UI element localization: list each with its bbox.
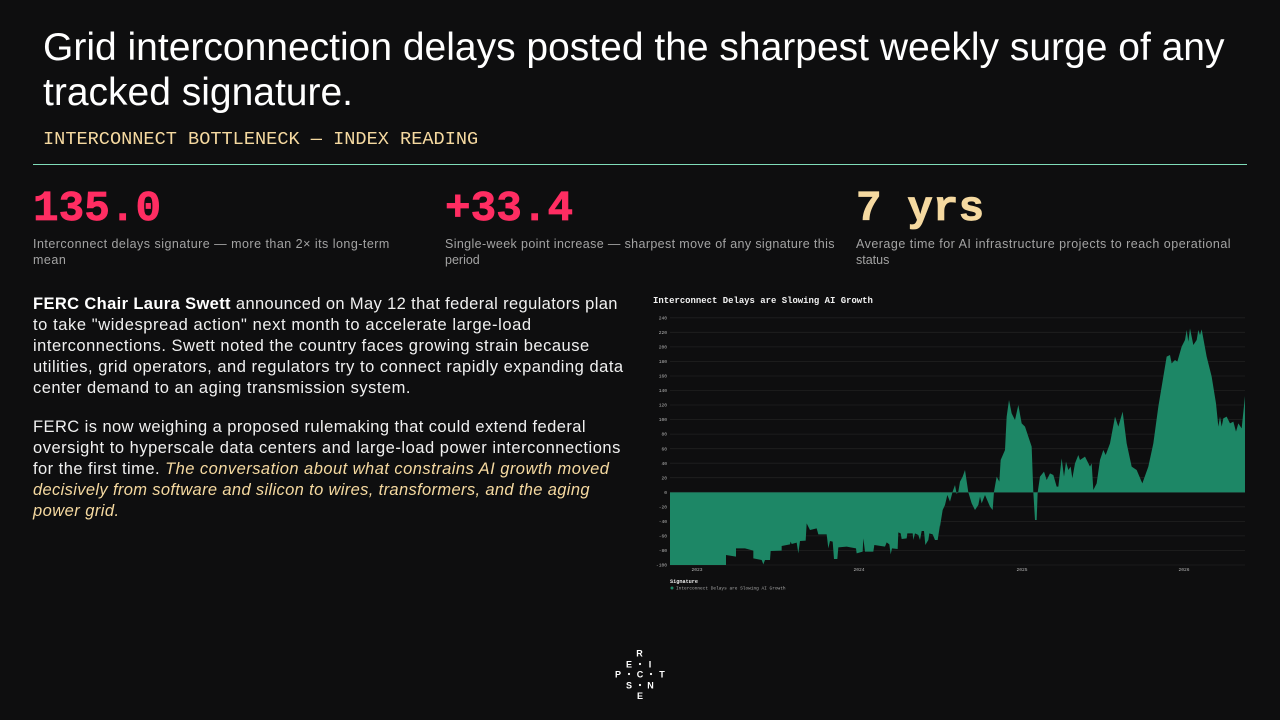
y axis labels: 20 [661,475,667,481]
header rule [33,164,1247,165]
body paragraph 2: power grid. [33,502,120,520]
stat: signature value: 135.0 [33,184,161,233]
x axis labels: 2025 [1016,567,1028,573]
y axis labels: 80 [661,432,667,438]
body paragraph 1: utilities, grid operators, and regulators try to connect rapidly expanding data [33,358,624,376]
y axis labels: -80 [659,548,667,554]
body paragraph 1: interconnections. Swett noted the country faces growing strain because [33,337,590,355]
stat caption: signature value [33,237,390,267]
y axis labels: 100 [659,417,667,423]
stat: average time: 7 yrs [856,184,984,233]
title: tracked signature. [43,71,353,114]
legend: Signature [670,579,698,585]
logo [615,648,665,701]
stat caption: weekly increase [445,237,835,267]
y axis labels: 140 [659,388,667,394]
stat caption: weekly increase: period [445,253,480,267]
y axis labels: 120 [659,403,667,409]
stat caption: weekly increase: Single-week point increase — sharpest move of any signature this [445,237,835,251]
y axis labels: 180 [659,359,667,365]
legend [670,579,786,592]
y axis labels: 240 [659,315,667,321]
y axis labels [656,315,667,569]
chart title: Interconnect Delays are Slowing AI Growth [653,296,873,306]
x axis labels: 2023 [691,567,703,573]
stat caption: average time: Average time for AI infrastructure projects to reach operational [856,237,1231,251]
y axis labels: 160 [659,374,667,380]
logo: E [626,660,632,670]
y axis labels: 0 [664,490,667,496]
logo: I [649,660,651,670]
logo: E [637,691,643,701]
y axis labels: 40 [661,461,667,467]
title [43,26,1225,114]
logo: T [659,670,665,680]
stat caption: signature value: Interconnect delays signature — more than 2× its long-term [33,237,390,251]
x axis labels [691,567,1190,573]
body paragraph 2: oversight to hyperscale data centers and large-load power interconnections [33,439,621,457]
body paragraph 2: FERC is now weighing a proposed rulemaking that could extend federal [33,418,586,436]
body paragraph 1: to take "widespread action" next month to accelerate large-load [33,316,532,334]
logo: S [626,680,632,690]
stat caption: average time [856,237,1231,267]
chart: interconnect delays area chart [653,296,1245,592]
body paragraph 2: for the first time. The conversation about what constrains AI growth moved [33,460,609,478]
body paragraph 2 [32,418,621,520]
subtitle: INTERCONNECT BOTTLENECK — INDEX READING [43,129,478,150]
legend: Interconnect Delays are Slowing AI Growth [676,586,786,592]
title: Grid interconnection delays posted the sharpest weekly surge of any [43,26,1225,69]
stat caption: signature value: mean [33,253,66,267]
logo: C [637,670,644,680]
x axis labels: 2026 [1178,567,1190,573]
logo: N [647,680,654,690]
y axis labels: -100 [656,563,667,569]
y axis labels: 220 [659,330,667,336]
y axis labels: 60 [661,446,667,452]
y axis labels: -40 [659,519,667,525]
body paragraph 1: center demand to an aging transmission system. [33,379,411,397]
area series [670,328,1245,565]
body paragraph 2: decisively from software and silicon to wires, transformers, and the aging [33,481,590,499]
logo: P [615,670,621,680]
y axis labels: -60 [659,534,667,540]
x axis labels: 2024 [853,567,865,573]
logo: R [636,648,643,658]
y axis labels: -20 [659,504,667,510]
y axis labels: 200 [659,344,667,350]
body paragraph 1 [33,295,624,397]
stat: weekly increase: +33.4 [445,184,573,233]
body paragraph 1: FERC Chair Laura Swett announced on May 12 that federal regulators plan [33,295,618,313]
stat caption: average time: status [856,253,889,267]
